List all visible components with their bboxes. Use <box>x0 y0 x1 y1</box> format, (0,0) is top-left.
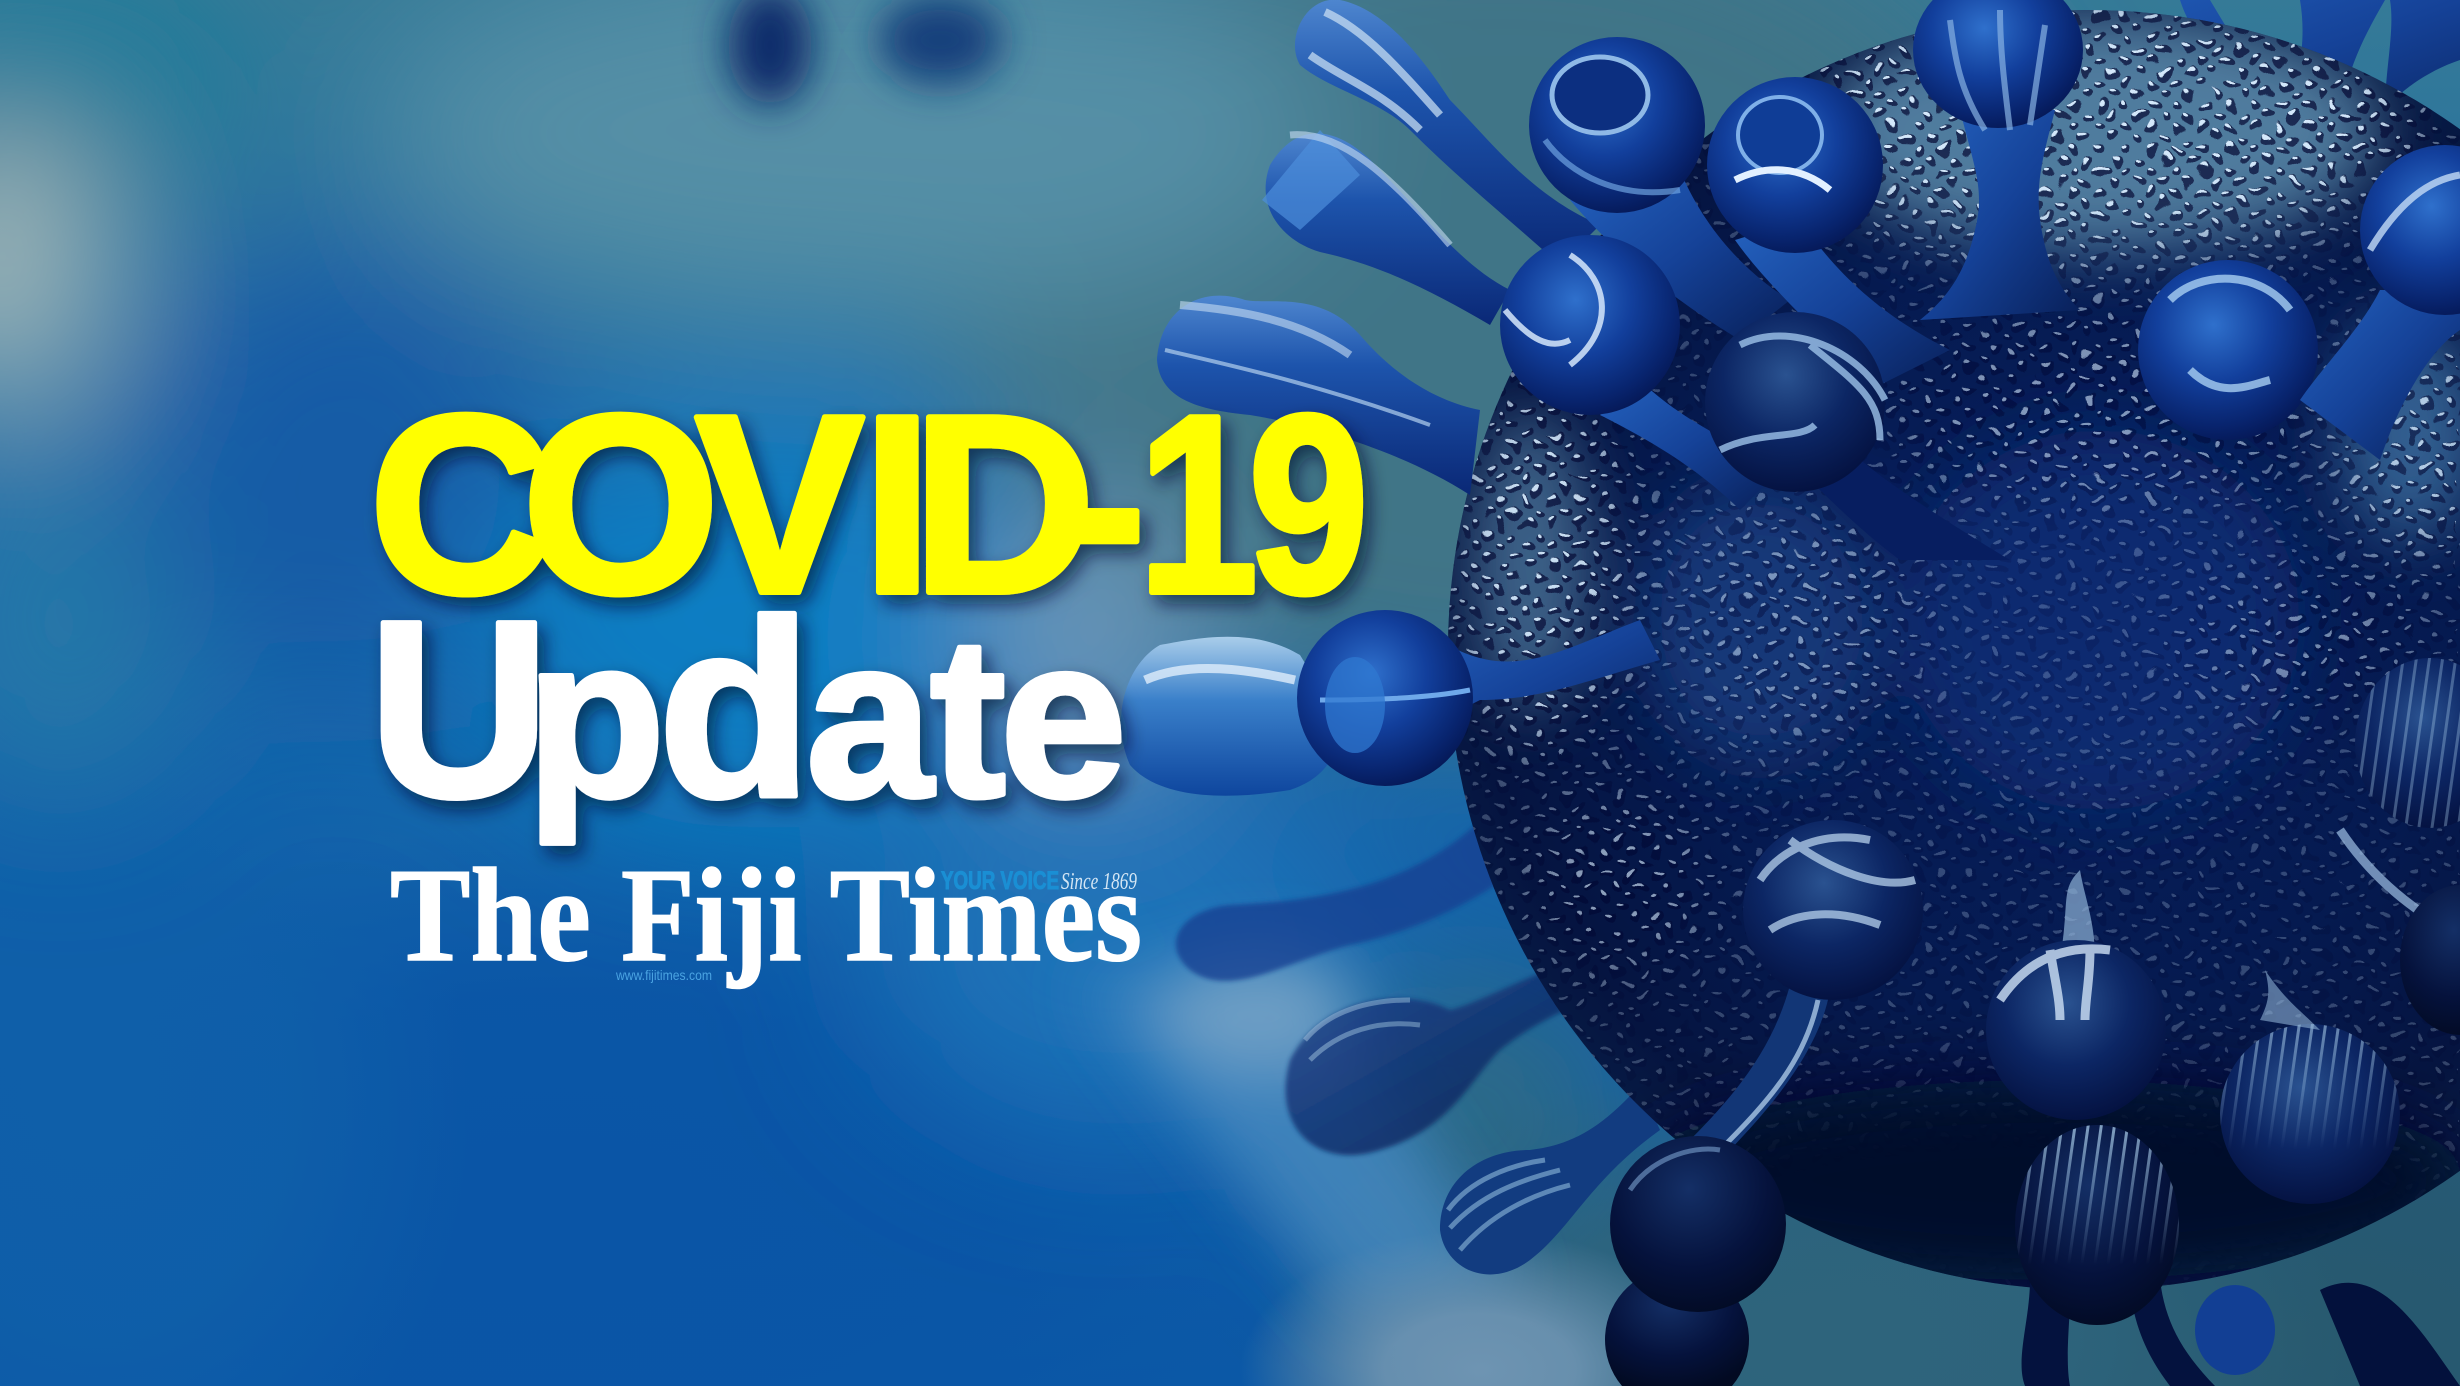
subtitle: Update: e <box>1000 591 1127 845</box>
title: COVID-19: COVID- <box>369 362 1147 646</box>
spike: left cup 3 <box>1500 235 1780 510</box>
website url: www.fijitimes.com <box>615 967 712 983</box>
virus body sphere <box>1448 10 2460 1288</box>
title: COVID-19: 19 <box>1138 362 1369 646</box>
spike: lower right striped head <box>2220 970 2400 1204</box>
spike: bottom dark heads <box>1605 1136 1786 1386</box>
spike: right edge cup <box>2300 145 2460 460</box>
spike: lower centre connecting stalk and head <box>1680 820 1923 1160</box>
spike: top cup 2 <box>1707 77 1950 390</box>
spike: upper-left faceted <box>1262 130 1510 325</box>
subtitle: Update: d <box>658 569 812 850</box>
spike stalks behind body top <box>1980 0 2460 170</box>
faded lower-left spikes <box>1176 800 1650 1155</box>
tagline: since 1869: Since 1869 <box>1061 869 1137 895</box>
subtitle: Update: t <box>930 591 1006 845</box>
spike: left double-lobed <box>1157 296 1480 495</box>
lit surface patches <box>1448 10 2460 1288</box>
spike: bottom centre bright head <box>1986 870 2166 1120</box>
spike: top centre <box>1913 0 2083 320</box>
spike: lower-left striped <box>1440 1085 1660 1274</box>
subtitle: Update <box>368 569 1127 850</box>
subtitle: Update: a <box>806 591 935 845</box>
spike: top right cup <box>2138 260 2318 440</box>
tagline: your voice: YOUR VOICE <box>941 867 1059 895</box>
coronavirus illustration <box>1121 0 2460 1386</box>
subtitle: Update: U <box>368 569 550 850</box>
spike: right edge heads <box>2320 658 2460 1386</box>
bumpy texture <box>1448 10 2460 1180</box>
spike: centre-left cup 4 <box>1705 312 2010 560</box>
logo: The Fiji Times: The Fiji Times <box>390 841 1142 989</box>
subtitle: Update: p <box>526 591 665 845</box>
spike: top-left elongated <box>1295 0 1600 265</box>
spike: left round head with pale lobe <box>1121 610 1660 796</box>
spike: bottom centre striped head <box>2015 1125 2275 1386</box>
spike: top-left cup 1 <box>1529 37 1790 340</box>
